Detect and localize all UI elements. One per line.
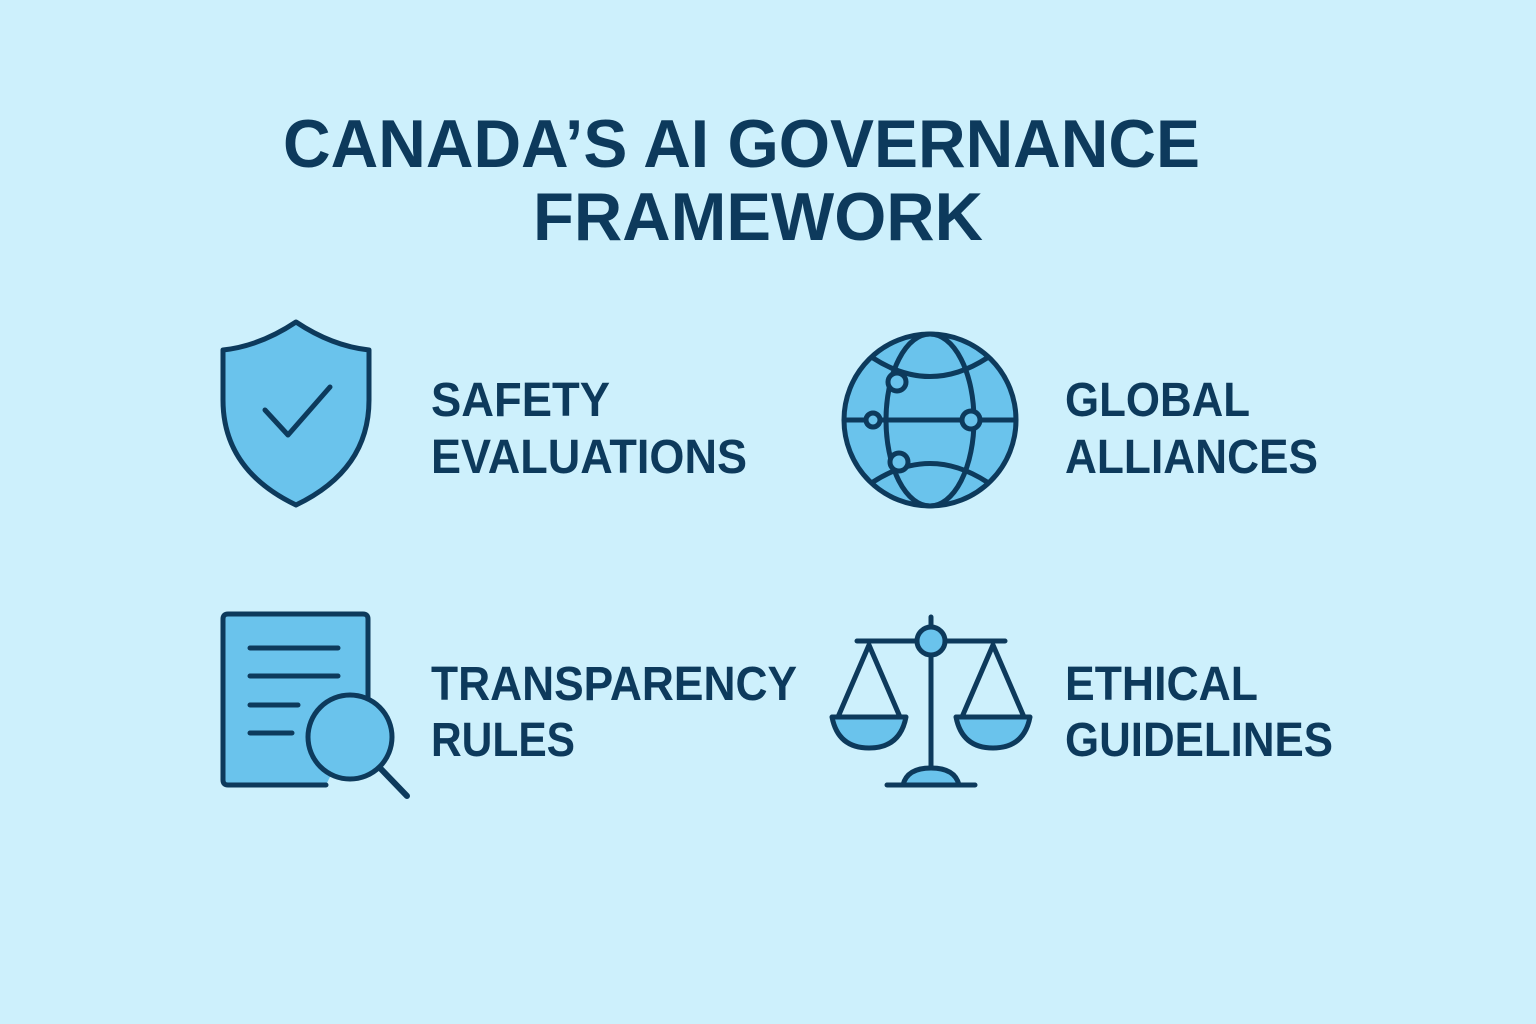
label: ethical guidelines: ETHICAL	[1065, 658, 1258, 711]
label: safety evaluations: SAFETY	[431, 374, 610, 427]
icon: scales	[832, 617, 1030, 785]
label: global alliances: GLOBAL	[1065, 374, 1250, 427]
label: transparency rules	[431, 658, 797, 767]
label: safety evaluations: EVALUATIONS	[431, 431, 747, 484]
icon: shield	[223, 322, 369, 505]
title: FRAMEWORK	[533, 179, 983, 255]
label: transparency rules: TRANSPARENCY	[431, 658, 797, 711]
title	[283, 106, 1200, 255]
icon: document with magnifier	[223, 614, 407, 796]
label: safety evaluations	[431, 374, 747, 484]
label: ethical guidelines	[1065, 658, 1333, 767]
title: CANADA’S AI GOVERNANCE	[283, 106, 1200, 182]
label: transparency rules: RULES	[431, 714, 575, 767]
icon: globe	[844, 334, 1016, 506]
label: ethical guidelines: GUIDELINES	[1065, 714, 1333, 767]
label: global alliances	[1065, 374, 1318, 484]
label: global alliances: ALLIANCES	[1065, 431, 1318, 484]
